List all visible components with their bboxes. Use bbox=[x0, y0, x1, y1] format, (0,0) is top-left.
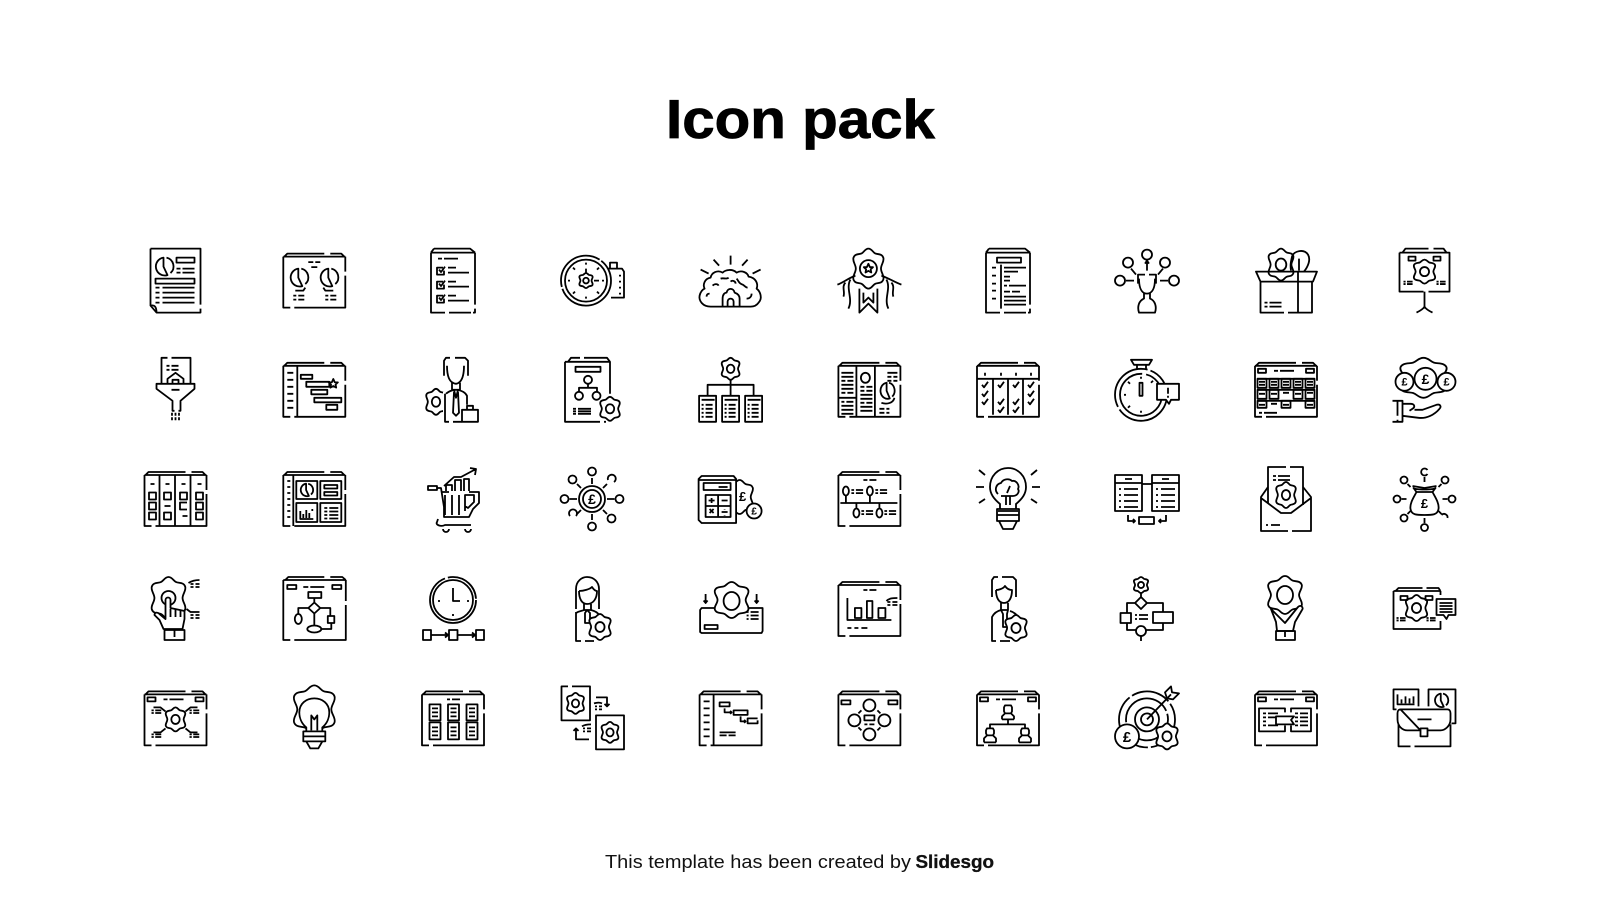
icon: calculator with gear and coin bbox=[699, 476, 762, 523]
icon: clock with process steps bbox=[423, 577, 484, 640]
icon: open box with gear and bulb bbox=[1256, 249, 1317, 313]
icon: window with two pie charts bbox=[283, 254, 345, 308]
icon: shopping cart with rising chart bbox=[428, 468, 479, 532]
footer credit: This template has been created by bbox=[605, 851, 912, 872]
icon: award badge with ribbon bbox=[837, 249, 901, 313]
icon: gantt window with star bbox=[283, 363, 345, 417]
icon: light bulb with brain bbox=[976, 468, 1040, 529]
icon: hand holding coins: £ bbox=[1443, 376, 1450, 388]
icon: businessman with gear bbox=[992, 577, 1027, 641]
icon: timeline window bbox=[838, 472, 900, 526]
icon: window with process circles bbox=[838, 691, 900, 745]
icon: brain with rays bbox=[699, 256, 761, 307]
icon: window with six cards bbox=[422, 691, 484, 745]
icon: person with connected nodes bbox=[1115, 250, 1179, 313]
icon: target with arrow, coin and gear: £ bbox=[1123, 729, 1132, 746]
title: Icon pack bbox=[666, 88, 935, 150]
icon grid bbox=[144, 249, 1456, 749]
icon: checklist document bbox=[431, 249, 475, 313]
icon: hand holding coins: £ bbox=[1422, 371, 1430, 387]
icon: clock with gear and bottle bbox=[561, 256, 624, 306]
icon: document with pie chart bbox=[150, 249, 200, 313]
icon: org chart window bbox=[977, 691, 1039, 745]
icon: businesswoman with gear bbox=[576, 577, 611, 641]
icon: two lists with arrows bbox=[1115, 475, 1179, 524]
icon: window with gear and speech bubble bbox=[1394, 588, 1456, 629]
icon: window with connected panels bbox=[1255, 691, 1317, 745]
icon: document with sidebar bbox=[986, 249, 1030, 313]
icon: calendar window bbox=[1255, 363, 1317, 417]
icon: briefcase with charts bbox=[1394, 689, 1456, 746]
icon: document with org chart and gear bbox=[565, 358, 620, 422]
icon: calculator with gear and coin: £ bbox=[751, 506, 757, 518]
icon: window with central gear and lists bbox=[144, 691, 206, 745]
icon: calculator with gear and coin: £ bbox=[739, 489, 747, 504]
footer credit: Slidesgo bbox=[916, 851, 994, 872]
icon: table with check marks bbox=[977, 363, 1039, 417]
icon: gantt window with arrows bbox=[700, 691, 762, 745]
icon: hand holding coins: £ bbox=[1401, 376, 1408, 388]
icon: flowchart window bbox=[283, 577, 346, 640]
icon: hand holding gear bbox=[1268, 576, 1303, 640]
icon: businessman with gear and briefcase bbox=[426, 358, 478, 422]
icon: presentation board with gear bbox=[1400, 249, 1450, 313]
icon: pound network bbox=[560, 468, 624, 530]
icon: exchange of two cards with gears bbox=[562, 686, 624, 749]
icon: hand touching gear bbox=[152, 577, 200, 640]
icon: kanban board bbox=[144, 472, 206, 526]
icon: target with arrow, coin and gear bbox=[1115, 686, 1179, 749]
icon: money bag network bbox=[1394, 468, 1456, 531]
icon: window with report columns bbox=[838, 363, 900, 417]
icon: envelope with document bbox=[1261, 467, 1311, 531]
icon: process flow with gear bbox=[1120, 577, 1173, 641]
icon: funnel with document bbox=[156, 358, 194, 422]
icon: light bulb with gear bbox=[294, 685, 335, 748]
icon: money bag network: £ bbox=[1421, 496, 1429, 511]
icon: pound network: £ bbox=[588, 491, 596, 507]
icon: gear tree with three tables bbox=[699, 358, 762, 422]
icon: hand holding coins bbox=[1392, 358, 1456, 422]
icon: gear with folder bbox=[700, 582, 763, 633]
icon: dashboard window bbox=[283, 472, 345, 526]
icon: bar chart window bbox=[838, 582, 900, 636]
icon: stopwatch with alert bubble bbox=[1115, 360, 1179, 421]
